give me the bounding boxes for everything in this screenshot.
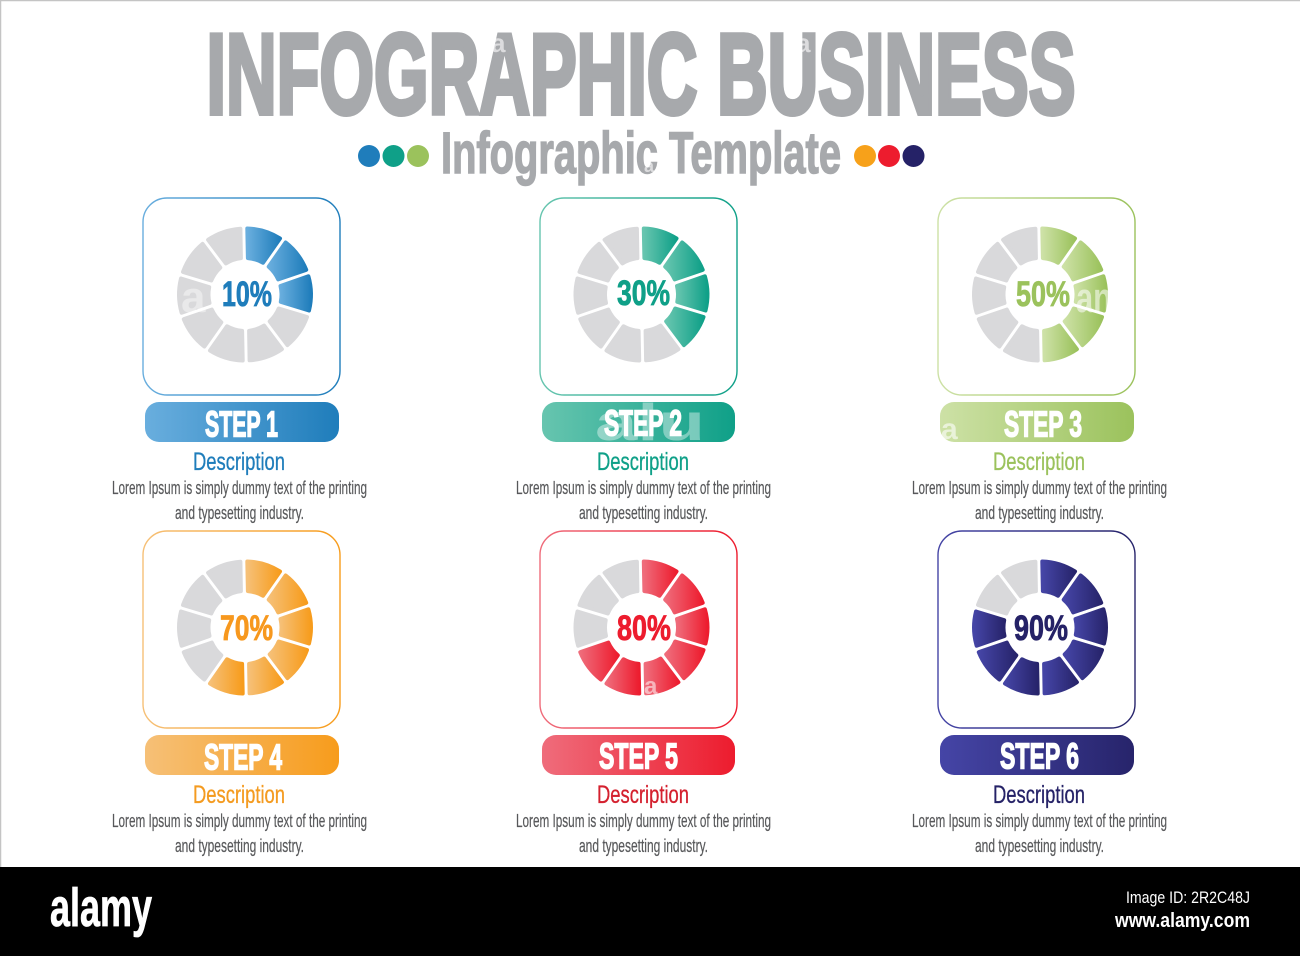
body text bbox=[112, 811, 367, 856]
step pill bbox=[940, 402, 1134, 442]
body text: Lorem Ipsum is simply dummy text of the printing bbox=[912, 478, 1167, 498]
step pill bbox=[940, 735, 1134, 775]
description heading: Description bbox=[597, 448, 689, 476]
body text bbox=[516, 811, 771, 856]
card frame bbox=[540, 198, 737, 395]
body text: and typesetting industry. bbox=[175, 503, 304, 523]
donut chart 90% bbox=[974, 562, 1106, 694]
body text: Lorem Ipsum is simply dummy text of the printing bbox=[112, 811, 367, 831]
watermark on pill: a bbox=[941, 413, 958, 446]
percent label: 30% bbox=[617, 274, 670, 313]
step label: STEP 2 bbox=[604, 402, 682, 444]
watermark on donut: an bbox=[1076, 274, 1112, 321]
panel: step 6 bbox=[912, 531, 1167, 856]
body text: Lorem Ipsum is simply dummy text of the printing bbox=[516, 811, 771, 831]
donut chart 30% bbox=[576, 228, 707, 360]
watermark marks: a bbox=[644, 156, 655, 176]
step pill bbox=[145, 735, 339, 775]
decorative dots left bbox=[358, 145, 429, 167]
step label: STEP 6 bbox=[1000, 736, 1079, 776]
alamy logo: alamy bbox=[50, 878, 152, 938]
body text bbox=[112, 478, 367, 523]
donut chart 80% bbox=[576, 562, 707, 694]
step pill bbox=[145, 402, 339, 442]
watermark marks: a bbox=[181, 273, 206, 322]
card frame bbox=[938, 198, 1135, 395]
percent label: 80% bbox=[617, 609, 671, 648]
watermark marks: a bbox=[491, 28, 506, 58]
body text: and typesetting industry. bbox=[579, 503, 708, 523]
description heading: Description bbox=[993, 781, 1085, 809]
step label: STEP 1 bbox=[205, 404, 278, 444]
step label: STEP 5 bbox=[599, 736, 678, 776]
footer bar bbox=[0, 867, 1300, 956]
percent label: 10% bbox=[222, 275, 272, 314]
step pill bbox=[542, 735, 735, 775]
watermark marks bbox=[181, 28, 811, 322]
step label: STEP 3 bbox=[1004, 404, 1082, 444]
body text bbox=[912, 811, 1167, 856]
percent label: 90% bbox=[1014, 609, 1068, 648]
body text: and typesetting industry. bbox=[975, 836, 1104, 856]
card frame bbox=[540, 531, 737, 728]
body text bbox=[516, 478, 771, 523]
body text: and typesetting industry. bbox=[975, 503, 1104, 523]
body text bbox=[912, 478, 1167, 523]
body text: and typesetting industry. bbox=[579, 836, 708, 856]
percent label: 70% bbox=[220, 609, 273, 648]
description heading: Description bbox=[193, 448, 285, 476]
decorative dots right bbox=[854, 145, 924, 167]
body text: Lorem Ipsum is simply dummy text of the printing bbox=[112, 478, 367, 498]
donut chart 10% bbox=[179, 228, 311, 360]
panel: step 1 bbox=[112, 198, 367, 523]
percent label: 50% bbox=[1016, 275, 1070, 314]
description heading: Description bbox=[193, 781, 285, 809]
website: www.alamy.com bbox=[1114, 910, 1250, 932]
panel: step 2 bbox=[516, 198, 771, 523]
step pill bbox=[542, 402, 735, 442]
panel: step 3 bbox=[912, 198, 1167, 523]
watermark marks: a bbox=[796, 28, 811, 58]
card frame bbox=[938, 531, 1135, 728]
card frame bbox=[143, 531, 340, 728]
panel: step 4 bbox=[112, 531, 367, 856]
watermark on pill: alu bbox=[595, 394, 705, 452]
card frame bbox=[143, 198, 340, 395]
watermark on donut: a bbox=[644, 673, 658, 700]
body text: and typesetting industry. bbox=[175, 836, 304, 856]
panel: step 5 bbox=[516, 531, 771, 856]
step label: STEP 4 bbox=[204, 736, 282, 778]
body text: Lorem Ipsum is simply dummy text of the printing bbox=[516, 478, 771, 498]
description heading: Description bbox=[993, 448, 1085, 476]
description heading: Description bbox=[597, 781, 689, 809]
donut chart 70% bbox=[179, 562, 311, 694]
image id: Image ID: 2R2C48J bbox=[1126, 888, 1250, 907]
subtitle: Infographic Template bbox=[441, 121, 841, 186]
body text: Lorem Ipsum is simply dummy text of the printing bbox=[912, 811, 1167, 831]
donut chart 50% bbox=[974, 228, 1106, 360]
